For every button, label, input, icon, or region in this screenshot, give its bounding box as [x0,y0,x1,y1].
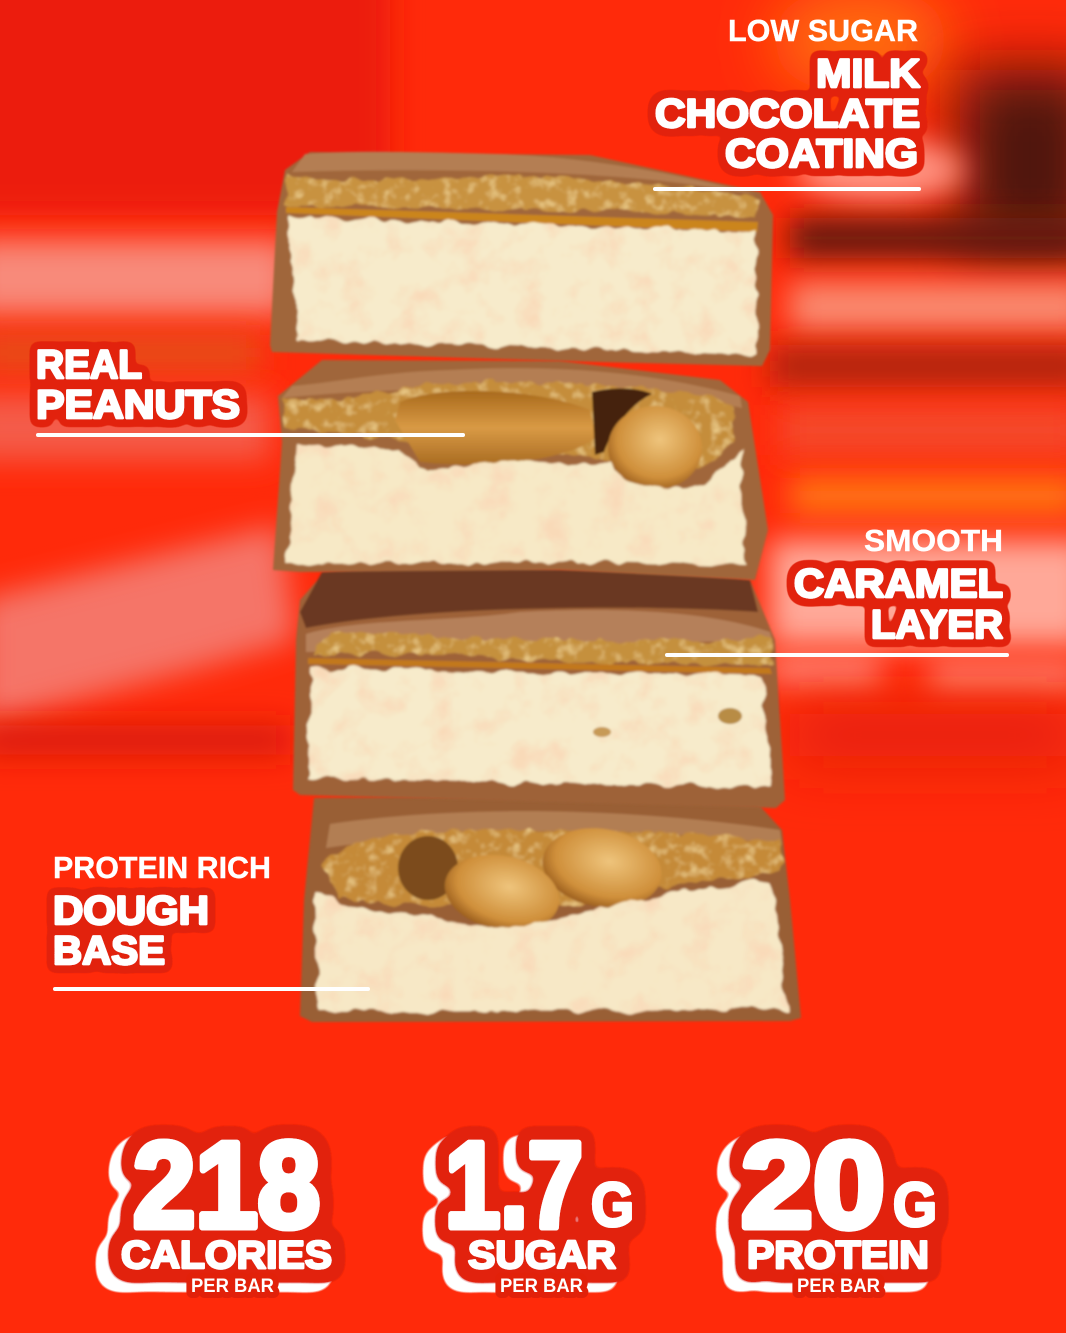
heading: dough base [53,889,209,973]
number and unit: SUGAR [468,1234,616,1277]
biscuit layer [312,632,772,664]
peanuts [398,836,458,900]
per bar: PER BAR [500,1276,583,1297]
heading: milk chocolate coating: COATING [725,132,918,176]
stat: 1.7g sugar [445,1117,634,1297]
dough [306,668,772,788]
per bar: PER BAR [191,1276,274,1297]
heading: real peanuts: REAL [36,343,142,387]
leader line [653,187,921,191]
leader line [665,653,1009,657]
bar 2: bar with peanuts [273,360,768,580]
number and unit: 20 [741,1117,885,1253]
bar 3: plain dough bar [293,568,785,808]
heading: real peanuts [36,343,240,427]
dough [314,880,788,1012]
bar 1: top plain dough bar [270,152,773,366]
heading: caramel layer: CARAMEL [794,562,1003,606]
label: milk chocolate coating [653,13,921,191]
number and unit: G [893,1171,937,1240]
caption: low sugar: LOW SUGAR [728,13,918,48]
heading: dough base: DOUGH [53,889,209,933]
heading: milk chocolate coating: CHOCOLATE [655,92,920,136]
leader line [36,433,465,437]
label: real peanuts [36,343,465,437]
number and unit [741,1117,937,1277]
peanuts and caramel [395,391,596,465]
per bar: PER BAR [797,1276,880,1297]
stat: 218 calories [121,1117,332,1297]
biscuit layer [322,830,782,905]
number and unit: 1.7 [445,1117,583,1253]
stat: 20g protein [741,1117,937,1297]
biscuit layer [282,382,735,470]
dough [288,217,758,355]
number and unit: G [591,1171,634,1240]
heading: caramel layer: LAYER [871,603,1003,647]
heading: milk chocolate coating [655,52,920,176]
label: dough base [53,850,370,991]
heading: milk chocolate coating: MILK [816,52,920,96]
number and unit: PROTEIN [747,1234,929,1277]
caption: protein rich: PROTEIN RICH [53,850,271,885]
bar 4: bottom bar with peanuts [300,797,801,1022]
number and unit: 218 [133,1117,320,1253]
biscuit layer [286,176,760,218]
leader line [53,987,370,991]
heading: caramel layer [794,562,1003,647]
caption: smooth: SMOOTH [864,523,1003,558]
label: caramel layer [665,523,1009,657]
dough [286,444,744,566]
heading: dough base: BASE [53,929,165,973]
heading: real peanuts: PEANUTS [36,383,240,427]
number and unit: CALORIES [121,1234,332,1277]
